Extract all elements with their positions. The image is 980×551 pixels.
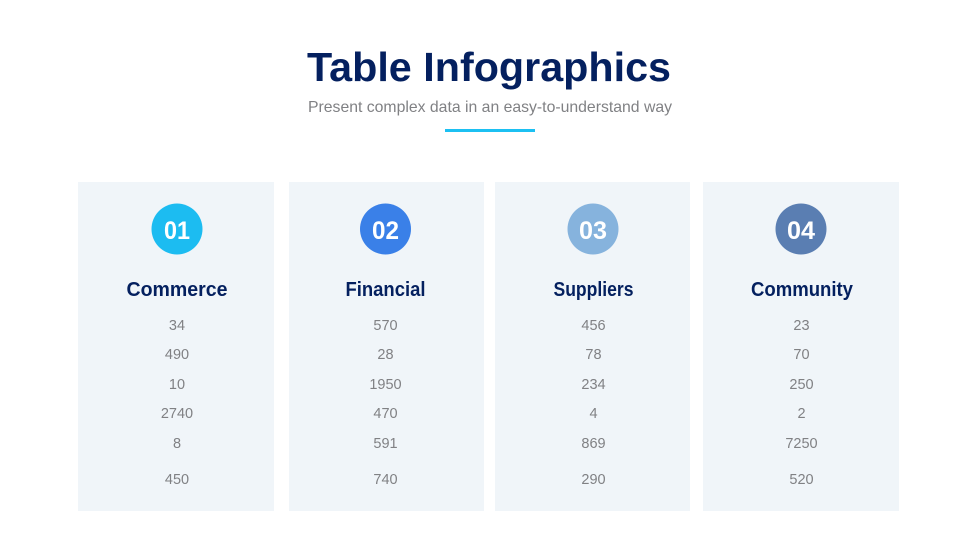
values: community: 2 <box>797 406 806 422</box>
icon: number badge 02 <box>360 204 411 254</box>
values: financial: 1950 <box>369 377 402 393</box>
subtitle: Present complex data in an easy-to-understand way <box>308 99 672 116</box>
icon: number badge 04 <box>776 204 826 254</box>
icon: number badge 02: 02 <box>372 217 399 245</box>
values: financial: 28 <box>377 347 394 363</box>
values: financial: 591 <box>373 436 398 452</box>
values: suppliers <box>581 318 606 488</box>
values: community: 520 <box>789 472 814 488</box>
values: suppliers: 78 <box>585 347 602 363</box>
heading: commerce: Commerce <box>126 279 228 301</box>
values: financial: 570 <box>373 318 398 334</box>
values: community: 7250 <box>785 436 818 452</box>
values: community: 70 <box>793 347 810 363</box>
values: commerce: 10 <box>169 377 185 393</box>
values: suppliers: 869 <box>581 436 606 452</box>
icon: number badge 01: 01 <box>164 217 190 245</box>
panel: commerce <box>78 182 274 511</box>
panel: community <box>703 182 899 511</box>
values: community <box>785 318 818 488</box>
values: commerce: 2740 <box>161 406 193 422</box>
values: commerce: 490 <box>165 347 189 363</box>
values: community: 250 <box>789 377 814 393</box>
panel: financial <box>289 182 484 511</box>
values: financial <box>369 318 402 488</box>
values: financial: 470 <box>373 406 398 422</box>
values: suppliers: 234 <box>581 377 606 393</box>
icon: number badge 01 <box>152 204 202 254</box>
title: Table Infographics <box>307 44 671 90</box>
values: suppliers: 456 <box>581 318 606 334</box>
values: suppliers: 290 <box>581 472 606 488</box>
heading: suppliers: Suppliers <box>554 279 634 301</box>
icon: number badge 03 <box>568 204 618 254</box>
values: commerce: 34 <box>169 318 185 334</box>
title underline <box>445 129 535 132</box>
values: commerce: 450 <box>165 472 189 488</box>
icon: number badge 04: 04 <box>787 217 815 245</box>
values: commerce: 8 <box>173 436 181 452</box>
heading: financial: Financial <box>346 279 426 301</box>
values: community: 23 <box>793 318 810 334</box>
values: financial: 740 <box>373 472 398 488</box>
heading: community: Community <box>751 279 854 301</box>
values: suppliers: 4 <box>589 406 598 422</box>
values: commerce <box>161 318 193 488</box>
icon: number badge 03: 03 <box>579 217 607 245</box>
panel: suppliers <box>495 182 690 511</box>
